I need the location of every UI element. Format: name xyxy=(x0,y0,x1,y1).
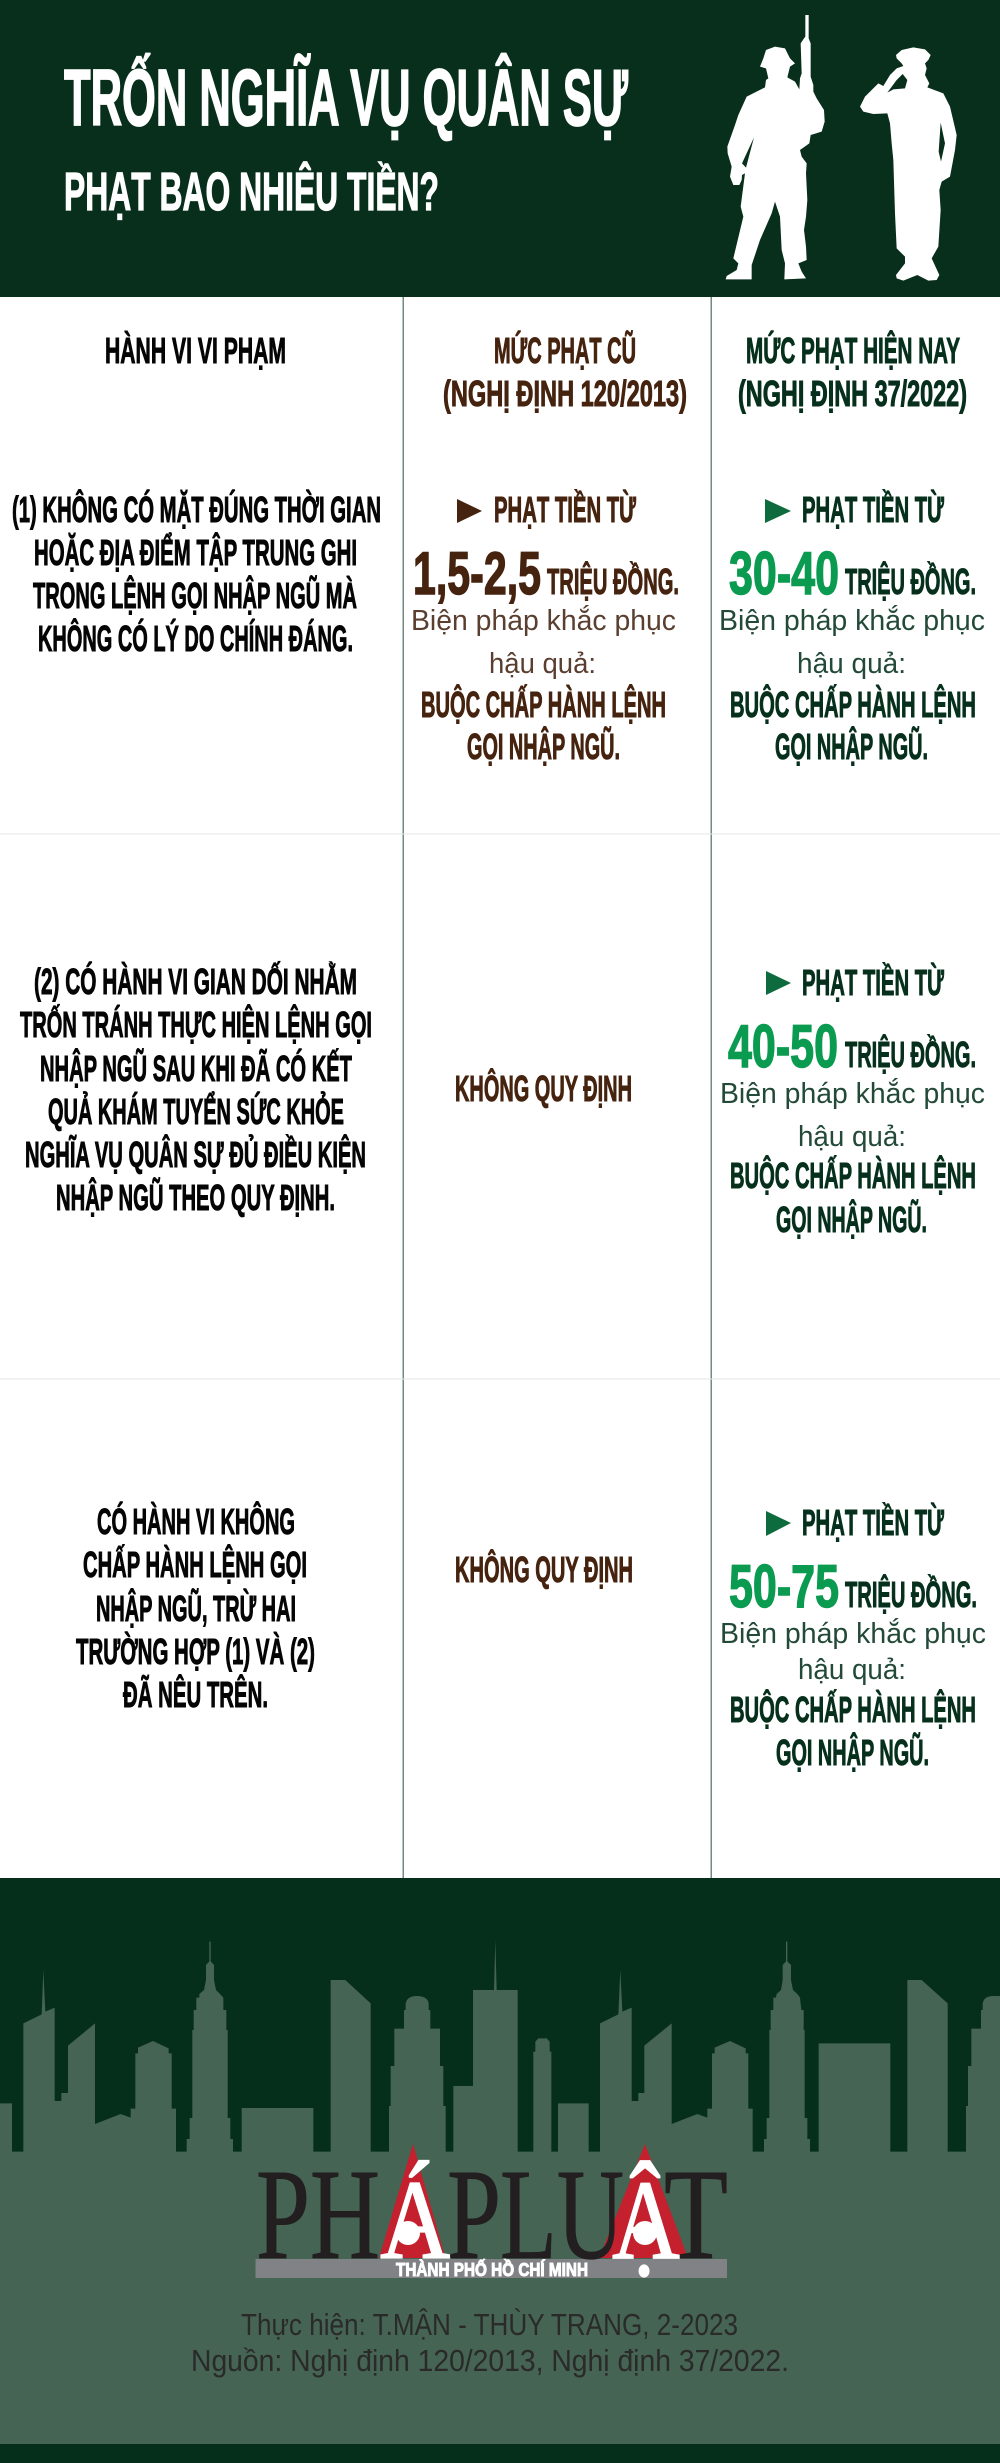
logo: Pháp Luật: P xyxy=(447,2143,501,2287)
panel: old penalty row 1: 1,5-2,5 xyxy=(413,540,541,607)
panel: current penalty row 1: hậu quả: xyxy=(797,648,906,680)
text block: violation 2: QUẢ KHÁM TUYỂN SỨC KHỎE xyxy=(48,1090,344,1132)
logo: Pháp Luật xyxy=(256,2143,728,2287)
text block: violation 1: HOẶC ĐỊA ĐIỂM TẬP TRUNG GHI xyxy=(34,531,357,573)
heading: old penalty column: (NGHỊ ĐỊNH 120/2013) xyxy=(443,373,687,414)
text block: violation 3 xyxy=(76,1500,315,1715)
credits text xyxy=(191,2307,789,2378)
subtitle: PHẠT BAO NHIÊU TIỀN? xyxy=(64,161,439,222)
panel: footer xyxy=(0,1878,1000,2463)
text block: violation 3: NHẬP NGŨ, TRỪ HAI xyxy=(96,1587,296,1629)
text block: violation 3: ĐÃ NÊU TRÊN. xyxy=(123,1673,268,1715)
panel: current penalty row 3: hậu quả: xyxy=(798,1654,906,1686)
text block: violation 3: TRƯỜNG HỢP (1) VÀ (2) xyxy=(76,1630,315,1672)
panel: old penalty row 1 xyxy=(411,488,679,767)
panel: header xyxy=(0,0,1000,297)
panel: current penalty row 1: 30-40 xyxy=(729,540,839,607)
panel: current penalty row 2: Biện pháp khắc phục xyxy=(720,1077,985,1110)
panel: current penalty row 1: Biện pháp khắc phục xyxy=(719,604,985,637)
text block: violation 2: NHẬP NGŨ THEO QUY ĐỊNH. xyxy=(56,1176,335,1218)
panel: current penalty row 2 xyxy=(720,961,985,1240)
panel: column dividers xyxy=(0,297,1000,1878)
icon: green arrow xyxy=(766,1511,791,1536)
icon: green arrow xyxy=(766,971,791,995)
icon: soldier with rifle silhouette xyxy=(726,15,825,279)
panel: current penalty row 2: 40-50 xyxy=(728,1013,838,1080)
credits text: Thực hiện: T.MẬN - THÙY TRANG, 2-2023 xyxy=(241,2307,738,2342)
panel: old penalty row 1: hậu quả: xyxy=(489,648,596,680)
panel: current penalty row 1 xyxy=(719,488,985,767)
text block: violation 1: TRONG LỆNH GỌI NHẬP NGŨ MÀ xyxy=(33,574,357,616)
text block: violation 1: KHÔNG CÓ LÝ DO CHÍNH ĐÁNG. xyxy=(38,617,353,659)
panel: current penalty row 3: Biện pháp khắc phục xyxy=(720,1617,986,1650)
panel: old penalty row 1: GỌI NHẬP NGŨ. xyxy=(467,725,620,767)
icon: green arrow xyxy=(765,499,791,523)
text block: violation 2: (2) CÓ HÀNH VI GIAN DỐI NHẰM xyxy=(34,960,357,1002)
panel: old penalty row 1: PHẠT TIỀN TỪ xyxy=(494,488,636,530)
logo: Pháp Luật: Á xyxy=(380,2158,451,2283)
logo: Pháp Luật: T xyxy=(664,2143,728,2287)
heading: old penalty column xyxy=(443,329,687,414)
heading: old penalty column: MỨC PHẠT CŨ xyxy=(494,329,636,371)
text block: violation 3: CÓ HÀNH VI KHÔNG xyxy=(97,1500,295,1542)
panel: old penalty row 1: BUỘC CHẤP HÀNH LỆNH xyxy=(421,683,666,725)
panel: old penalty row 1: Biện pháp khắc phục xyxy=(411,604,676,637)
text block: violation 2 xyxy=(20,960,372,1218)
logo: Pháp Luật: LU xyxy=(500,2143,624,2287)
icon: saluting officer silhouette xyxy=(860,47,957,281)
logo: Pháp Luật: Ậ xyxy=(612,2158,680,2283)
text block: violation 3: CHẤP HÀNH LỆNH GỌI xyxy=(83,1543,307,1585)
icon: brown arrow xyxy=(457,499,482,523)
text: old penalty row 3: KHÔNG QUY ĐỊNH xyxy=(455,1548,633,1590)
logo: Pháp Luật: THÀNH PHỐ HỒ CHÍ MINH xyxy=(396,2259,588,2280)
skyline silhouette xyxy=(0,1940,1000,2153)
text block: violation 1 xyxy=(12,488,381,659)
panel: current penalty row 3: 50-75 xyxy=(729,1553,839,1620)
text: old penalty row 2: KHÔNG QUY ĐỊNH xyxy=(455,1067,632,1109)
panel: current penalty row 2: hậu quả: xyxy=(798,1121,906,1153)
text block: violation 2: NHẬP NGŨ SAU KHI ĐÃ CÓ KẾT xyxy=(40,1047,352,1089)
panel: current penalty row 3 xyxy=(720,1501,986,1773)
credits text: Nguồn: Nghị định 120/2013, Nghị định 37/2022. xyxy=(191,2343,789,2378)
heading: violation column: HÀNH VI VI PHẠM xyxy=(105,330,286,371)
logo: Pháp Luật: PH xyxy=(256,2143,380,2287)
text block: violation 2: TRỐN TRÁNH THỰC HIỆN LỆNH GỌI xyxy=(20,1003,372,1045)
panel: old penalty row 1: TRIỆU ĐỒNG. xyxy=(547,560,679,602)
text block: violation 1: (1) KHÔNG CÓ MẶT ĐÚNG THỜI GIAN xyxy=(12,488,381,530)
text block: violation 2: NGHĨA VỤ QUÂN SỰ ĐỦ ĐIỀU KIỆN xyxy=(25,1133,366,1175)
heading: current penalty column xyxy=(738,329,967,414)
